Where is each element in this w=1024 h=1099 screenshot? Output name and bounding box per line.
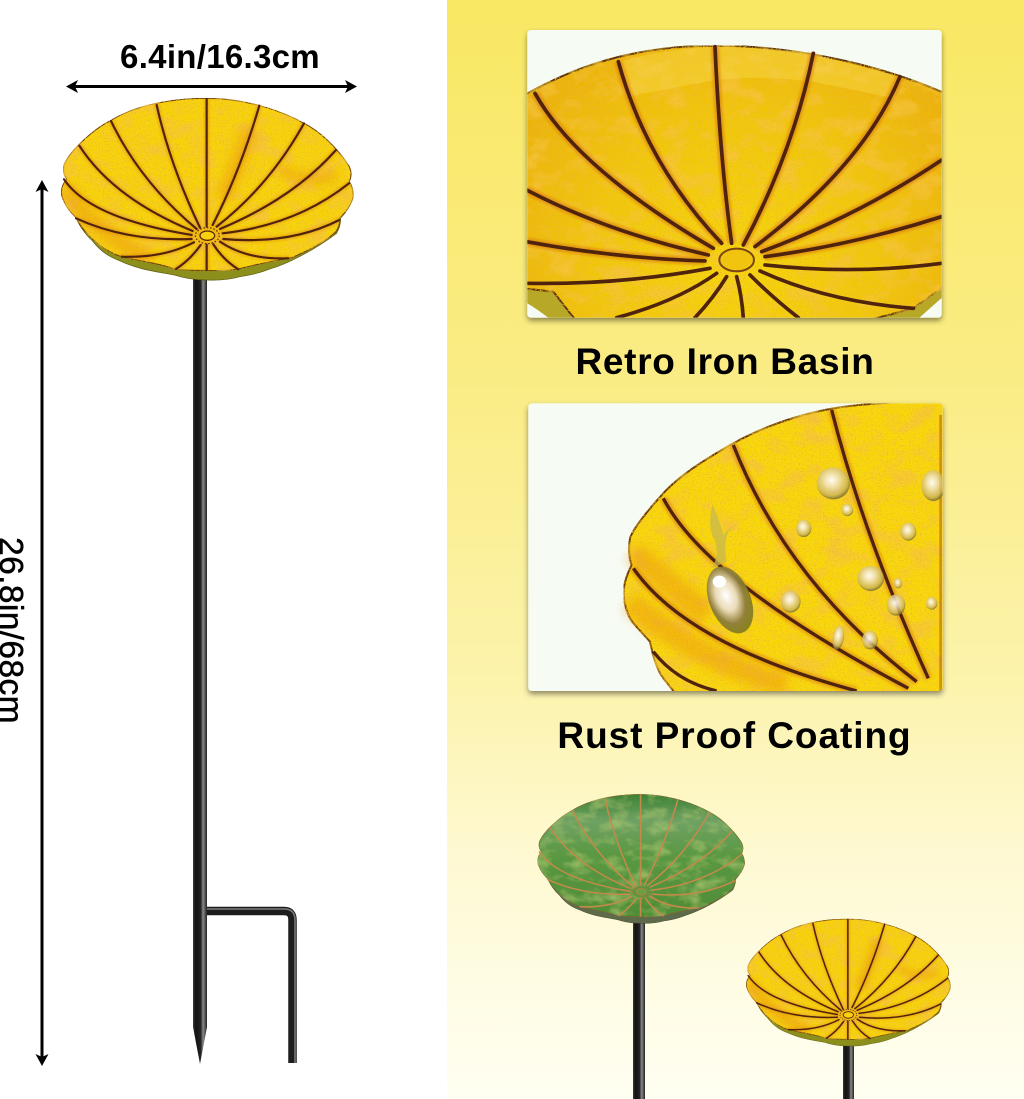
green basin variant bbox=[538, 794, 745, 923]
basin ribs close-up bbox=[527, 47, 942, 318]
orange lower-left tint bbox=[630, 552, 787, 685]
height dimension arrow bbox=[36, 180, 48, 1066]
rib glow bbox=[527, 47, 942, 261]
stake pole bbox=[193, 275, 207, 1064]
yellow stake pole bbox=[843, 1040, 854, 1099]
background: right yellow gradient panel bbox=[447, 0, 1024, 1099]
panel: rust proof coating close-up bbox=[528, 400, 950, 695]
faint right rib bbox=[939, 415, 942, 691]
basin ribs bbox=[633, 410, 928, 691]
basin surface with coating bbox=[624, 400, 950, 695]
panel: retro iron basin close-up bbox=[523, 30, 945, 322]
width dimension arrow bbox=[66, 80, 357, 93]
basin hub close-up bbox=[719, 249, 754, 271]
heading: rust proof coating: Rust Proof Coating bbox=[557, 715, 912, 756]
heading: retro iron basin: Retro Iron Basin bbox=[575, 341, 875, 382]
main yellow basin bbox=[61, 98, 353, 280]
width dimension label: 6.4in/16.3cm bbox=[120, 38, 320, 75]
main stake with pole and support leg bbox=[193, 275, 295, 1064]
large running droplet bbox=[706, 505, 754, 634]
rib glow bbox=[633, 410, 928, 691]
support crossbar and leg bbox=[207, 909, 295, 1063]
water droplets bbox=[781, 467, 945, 650]
green stake pole bbox=[633, 915, 645, 1099]
basin underside bands bbox=[527, 287, 942, 318]
small yellow basin variant bbox=[746, 919, 950, 1046]
basin surface close-up bbox=[523, 46, 945, 322]
lighter rim band bbox=[620, 47, 900, 98]
